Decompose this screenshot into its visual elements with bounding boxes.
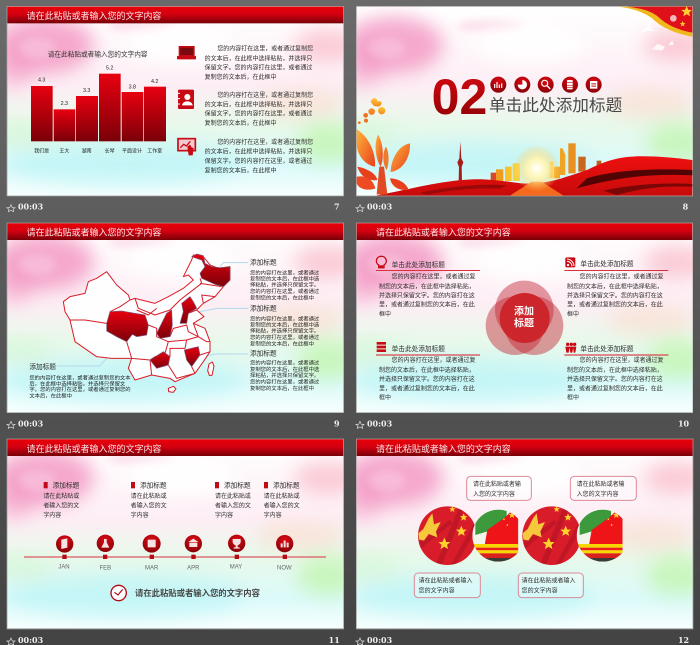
slide 7	[0, 6, 361, 212]
block bottom right: 制您的文本后，在此框中选择粘贴，	[567, 366, 663, 374]
callout 4: 文本后，在此框中	[29, 392, 72, 400]
callout 4: 后，在此框中选择粘贴，并选择只保留文	[29, 379, 126, 387]
callout 1: 复制您的文本后，在此框中	[250, 294, 314, 302]
callout 4: 字。您的内容打在这里，或者通过复制您的	[29, 385, 131, 393]
timeline: NOW	[277, 565, 292, 571]
footer slide 9	[7, 418, 340, 428]
timeline: APR	[187, 565, 200, 571]
venn circles: 标题	[514, 317, 534, 330]
bar chart: 平面设计	[122, 148, 142, 155]
China map	[63, 254, 230, 392]
item 2: 请在此粘贴或	[131, 492, 167, 500]
item 2: 字内容	[131, 511, 149, 519]
slide 12	[340, 439, 700, 645]
text box 1: 入您的文字内容	[473, 490, 515, 498]
icon row	[490, 77, 602, 93]
callout 1	[250, 257, 320, 302]
slide 9 header bar: 请在此粘贴或者输入您的文字内容	[27, 227, 161, 238]
block top right: 里，或者通过复制您的文本后，在此	[567, 301, 663, 309]
footer slide 9: 00:03	[18, 418, 44, 428]
block top right: 单击此处添加标题	[580, 259, 634, 268]
footer slide 7: 7	[334, 202, 340, 212]
item 3: 字内容	[215, 511, 233, 519]
callout 3: 您的内容打在这里，或者通过	[250, 359, 320, 367]
slide 7 header bar: 请在此粘贴或者输入您的文字内容	[27, 10, 161, 21]
item 4: 字内容	[264, 511, 282, 519]
text block 2: 保留文字。您的内容打在这里，或者通过	[205, 110, 312, 118]
text box 4: 请在此粘贴或者输入	[522, 577, 576, 585]
timeline caption: 请在此粘贴或者输入您的文字内容	[135, 588, 261, 598]
item 2	[131, 481, 167, 519]
text box 2: 入您的文字内容	[577, 490, 619, 498]
footer slide 10: 10	[678, 418, 690, 428]
footer slide 12	[356, 635, 689, 645]
callout 2: 复制您的文本后，在此框中选	[250, 321, 320, 329]
text block 2: 您的内容打在这里，或者通过复制您	[217, 91, 313, 99]
callout 2	[250, 304, 320, 348]
footer slide 10: 00:03	[367, 418, 393, 428]
bar chart: 4.3	[38, 78, 45, 84]
item 4: 添加标题	[273, 481, 300, 490]
text block 2	[205, 91, 313, 127]
icon: contact book	[178, 90, 194, 109]
text block 3	[205, 138, 313, 174]
slide 12 header bar: 请在此粘贴或者输入您的文字内容	[376, 443, 511, 454]
footer slide 7: 00:03	[18, 202, 44, 212]
block bottom left: 单击此处添加标题	[392, 344, 445, 353]
block bottom left: 里，或者通过复制您的文本后，在此	[379, 384, 475, 392]
text block 2: 的文本后，在此框中选择粘贴，并选择只	[205, 100, 312, 108]
footer slide 7	[7, 202, 340, 212]
bar chart: 长琴	[105, 148, 115, 155]
callout 1: 您的内容打在这里，或者通过	[250, 268, 320, 276]
flag circles left	[417, 505, 520, 567]
bar chart	[31, 50, 166, 155]
text block 1: 您的内容打在这里，或者通过复制您	[217, 44, 313, 52]
timeline: JAN	[58, 564, 70, 570]
callout 3: 您的内容打在这里，或者通过	[250, 377, 320, 385]
slide 8	[340, 6, 700, 212]
item 1: 请在此粘贴或	[43, 492, 79, 500]
callout 4	[29, 362, 131, 400]
text box 3: 您的文字内容	[419, 586, 455, 594]
bar chart: 湖南	[82, 148, 92, 155]
footer slide 12: 12	[678, 635, 689, 645]
block bottom right: 框中	[567, 394, 579, 402]
icon: touch chart	[178, 139, 195, 155]
footer slide 12: 00:03	[367, 635, 393, 645]
item 1: 者输入您的文	[43, 502, 79, 510]
text block 3: 您的内容打在这里，或者通过复制您	[217, 138, 313, 146]
text box 2	[570, 476, 636, 500]
block top left: 您的内容打在这里，或者通过复	[392, 272, 475, 280]
text box 3: 请在此粘贴或者输入	[419, 577, 473, 585]
item 1	[43, 481, 80, 519]
slide 10 header bar	[357, 223, 692, 240]
callout 3: 择粘贴，并选择只保留文字。	[250, 371, 319, 379]
venn circles: 添加	[514, 305, 534, 318]
item 4: 请在此粘贴或	[264, 492, 300, 500]
slide 11	[0, 439, 361, 645]
item 2: 者输入您的文	[131, 502, 167, 510]
callout 1: 择粘贴，并选择只保留文字。	[250, 281, 319, 289]
callout 2: 复制您的文本后，在此框中	[250, 340, 314, 348]
block bottom right: 里，或者通过复制您的文本后，在此	[567, 384, 663, 392]
block bottom left: 您的内容打在这里，或者通过复	[392, 356, 475, 364]
callout 2: 择粘贴，并选择只保留文字。	[250, 327, 319, 335]
item 1: 字内容	[43, 511, 61, 519]
block top right	[564, 257, 668, 318]
slide 11 header bar: 请在此粘贴或者输入您的文字内容	[27, 443, 161, 454]
callout 3	[250, 348, 320, 392]
footer slide 11	[7, 635, 340, 645]
bar chart: 2.3	[61, 101, 68, 107]
section number: 02	[432, 69, 487, 125]
text block 1: 的文本后，在此框中选择粘贴，并选择只	[205, 54, 312, 62]
slide 12 header bar	[357, 439, 693, 456]
callout 2: 您的内容打在这里，或者通过	[250, 333, 320, 341]
timeline: MAR	[145, 565, 159, 571]
block top left: 框中	[379, 310, 391, 318]
callout 1: 复制您的文本后，在此框中选	[250, 275, 320, 283]
block top left	[376, 256, 480, 318]
text block 2: 复制您的文本后，在此框中	[205, 119, 276, 127]
venn circles	[486, 281, 563, 355]
bar chart: 我们是	[34, 148, 49, 155]
block top left: 单击此处添加标题	[392, 260, 445, 269]
block bottom right: 并选择只保留文字。您的内容打在这	[567, 375, 663, 383]
footer slide 11: 00:03	[18, 635, 44, 645]
block top right: 并选择只保留文字。您的内容打在这	[567, 292, 663, 300]
block bottom right: 您的内容打在这里，或者通过复	[580, 356, 663, 364]
slide 10 header bar: 请在此粘贴或者输入您的文字内容	[376, 227, 511, 238]
item 4	[264, 481, 300, 519]
bar chart: 王大	[59, 148, 69, 155]
flag circles right	[521, 505, 624, 567]
slide 7 header bar	[7, 7, 343, 23]
footer slide 11: 11	[329, 635, 340, 645]
slide 9 header bar	[7, 223, 343, 240]
block top left: 并选择只保留文字。您的内容打在这	[379, 292, 475, 300]
footer slide 9: 9	[334, 418, 340, 428]
slide 8 title: 单击此处添加标题	[489, 96, 623, 115]
block bottom left: 制您的文本后，在此框中选择粘贴，	[379, 366, 475, 374]
callout 4: 添加标题	[29, 362, 56, 371]
block top left: 里，或者通过复制您的文本后，在此	[379, 301, 475, 309]
footer slide 8: 00:03	[367, 202, 393, 212]
text block 3: 保留文字。您的内容打在这里，或者通过	[205, 157, 312, 165]
text box 1: 请在此粘贴或者输	[473, 480, 521, 488]
callout 3: 添加标题	[250, 348, 277, 357]
block bottom left	[376, 342, 480, 402]
text box 2: 请在此粘贴或者输	[577, 480, 625, 488]
item 4: 者输入您的文	[264, 502, 300, 510]
text box 4	[518, 573, 583, 598]
text box 1	[467, 476, 531, 500]
timeline: FEB	[100, 565, 111, 571]
bar chart: 4.2	[151, 79, 158, 85]
callout 4: 您的内容打在这里，或者通过复制您的文本	[29, 374, 131, 382]
item 1: 添加标题	[53, 481, 80, 490]
icon: clock	[111, 585, 126, 601]
item 3: 者输入您的文	[215, 502, 251, 510]
text block 1	[205, 44, 313, 81]
skyline	[457, 142, 601, 181]
sun glow	[513, 145, 560, 192]
doves	[639, 19, 674, 51]
text block 3: 复制您的文本后，在此框中	[205, 166, 276, 174]
icon: laptop	[177, 46, 196, 59]
text block 1: 保留文字。您的内容打在这里，或者通过	[205, 64, 312, 72]
callout lines	[57, 263, 248, 366]
text block 1: 复制您的文本后，在此框中	[205, 73, 276, 81]
corner flag	[618, 6, 692, 37]
callout 2: 添加标题	[250, 304, 277, 313]
text box 3	[414, 573, 480, 598]
block bottom left: 框中	[379, 394, 391, 402]
slide 9	[0, 223, 361, 428]
bar chart: 5.2	[106, 65, 113, 71]
item 3	[215, 481, 251, 519]
item 2: 添加标题	[140, 481, 167, 490]
item 3: 添加标题	[224, 481, 251, 490]
block bottom right: 单击此处添加标题	[580, 344, 634, 353]
text box 4: 您的文字内容	[522, 586, 558, 594]
callout 3: 复制您的文本后，在此框中	[250, 384, 314, 392]
block bottom right	[564, 343, 668, 402]
callout 1: 您的内容打在这里，或者通过	[250, 287, 320, 295]
footer slide 8	[356, 202, 689, 212]
slide 10	[340, 223, 700, 428]
red ribbon	[377, 156, 692, 196]
timeline: MAY	[230, 564, 242, 570]
block top right: 制您的文本后，在此框中选择粘贴，	[567, 282, 663, 290]
callout 1: 添加标题	[250, 257, 277, 266]
timeline	[24, 535, 326, 571]
callout 2: 您的内容打在这里，或者通过	[250, 314, 320, 322]
block top right: 框中	[567, 310, 579, 318]
tree of leaves	[357, 129, 410, 194]
text block 3: 的文本后，在此框中选择粘贴，并选择只	[205, 148, 312, 156]
callout 3: 复制您的文本后，在此框中选	[250, 365, 320, 373]
hearts	[358, 98, 385, 124]
block bottom left: 并选择只保留文字。您的内容打在这	[379, 375, 475, 383]
block top left: 制您的文本后，在此框中选择粘贴，	[379, 282, 475, 290]
bar chart: 3.3	[83, 88, 90, 94]
bar chart: 工作室	[147, 148, 162, 155]
bar chart: 请在此粘贴或者输入您的文字内容	[48, 50, 148, 59]
bar chart: 3.8	[129, 84, 136, 90]
item 3: 请在此粘贴或	[215, 492, 251, 500]
slide 11 header bar	[7, 439, 343, 456]
block top right: 您的内容打在这里，或者通过复	[580, 272, 663, 280]
footer slide 10	[356, 418, 690, 428]
footer slide 8: 8	[683, 202, 689, 212]
